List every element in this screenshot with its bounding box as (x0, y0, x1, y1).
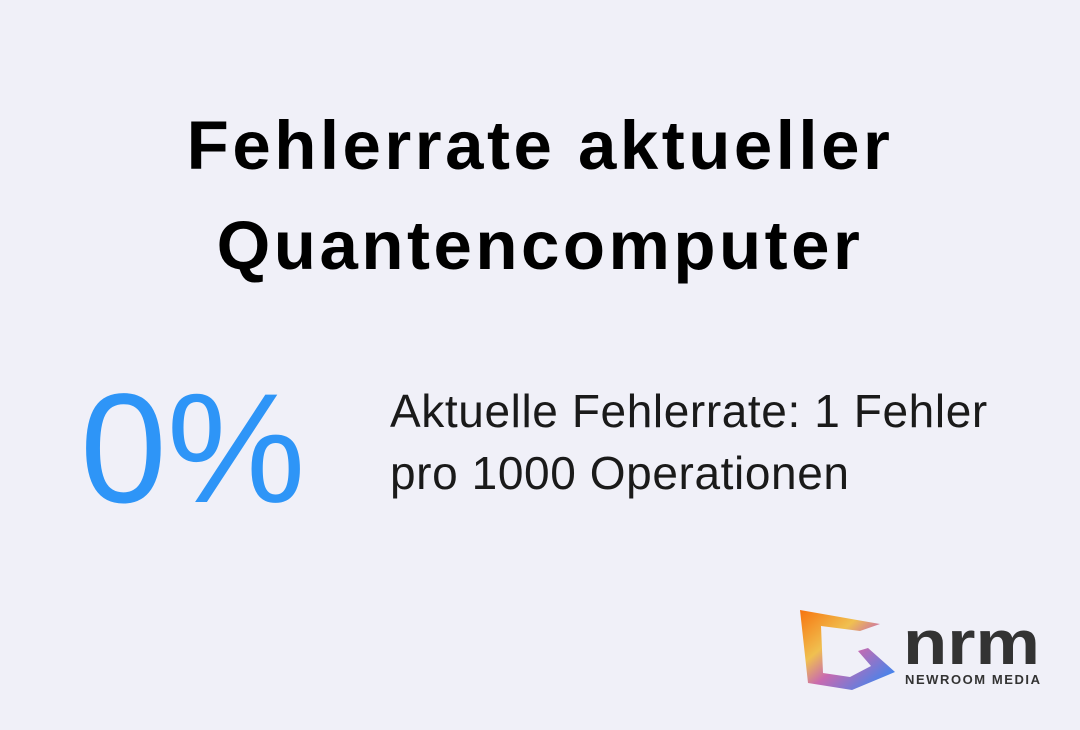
logo: nrm newroom media: NEWROOM MEDIA (905, 672, 1041, 687)
big stat: 0%: 0% (80, 362, 305, 536)
logo: nrm newroom media (800, 609, 1041, 690)
icon: logo mark (800, 610, 895, 690)
description text: Aktuelle Fehlerrate: 1 Fehler (390, 385, 988, 437)
title: Quantencomputer (217, 207, 863, 284)
description text: pro 1000 Operationen (390, 447, 850, 499)
title (187, 107, 893, 284)
description text (390, 385, 988, 499)
logo: nrm newroom media: nrm (903, 609, 1040, 678)
title: Fehlerrate aktueller (187, 107, 893, 184)
